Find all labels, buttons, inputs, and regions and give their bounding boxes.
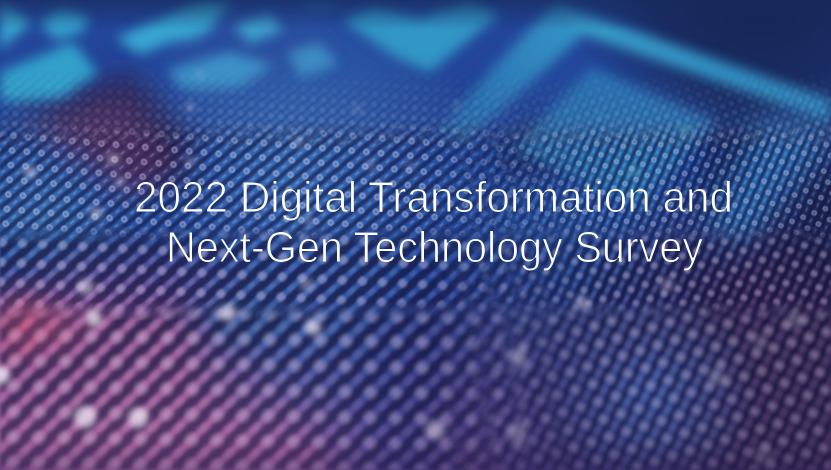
digit grid: right, steeper columns <box>448 84 831 470</box>
pink tint over left pixels <box>0 100 180 360</box>
title: 2022 Digital Transformation and <box>134 173 733 222</box>
title: Next-Gen Technology Survey <box>166 223 703 272</box>
digit grid: left, near-horizontal diagonals <box>0 82 581 470</box>
cyan pixel blocks and frame <box>0 0 831 206</box>
title <box>134 173 733 272</box>
